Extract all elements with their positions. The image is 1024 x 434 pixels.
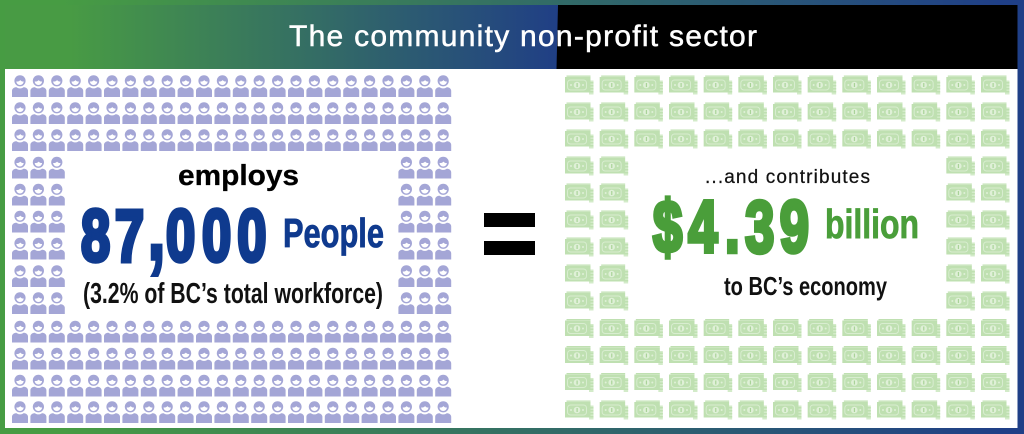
equals sign (484, 213, 535, 255)
stat: 87,000 (81, 166, 266, 283)
note: to BC's economy: to BC’s economy (724, 271, 887, 301)
label: People: People (283, 210, 384, 256)
left text block: employs: employs (178, 160, 299, 192)
stat: 87,000: , (146, 166, 167, 283)
money icon grid (565, 76, 1010, 420)
label: billion: billion (825, 201, 919, 247)
title banner (5, 5, 1018, 69)
stat: $4.39: $4.39 (653, 187, 809, 268)
note: workforce share: (3.2% of BC’s total workforce) (83, 278, 383, 310)
right text block: and contributes: ...and contributes (705, 167, 870, 188)
people icon grid (12, 75, 451, 423)
title: The community non-profit sector (289, 20, 757, 53)
stat: 87,000: 87000 (81, 196, 266, 277)
